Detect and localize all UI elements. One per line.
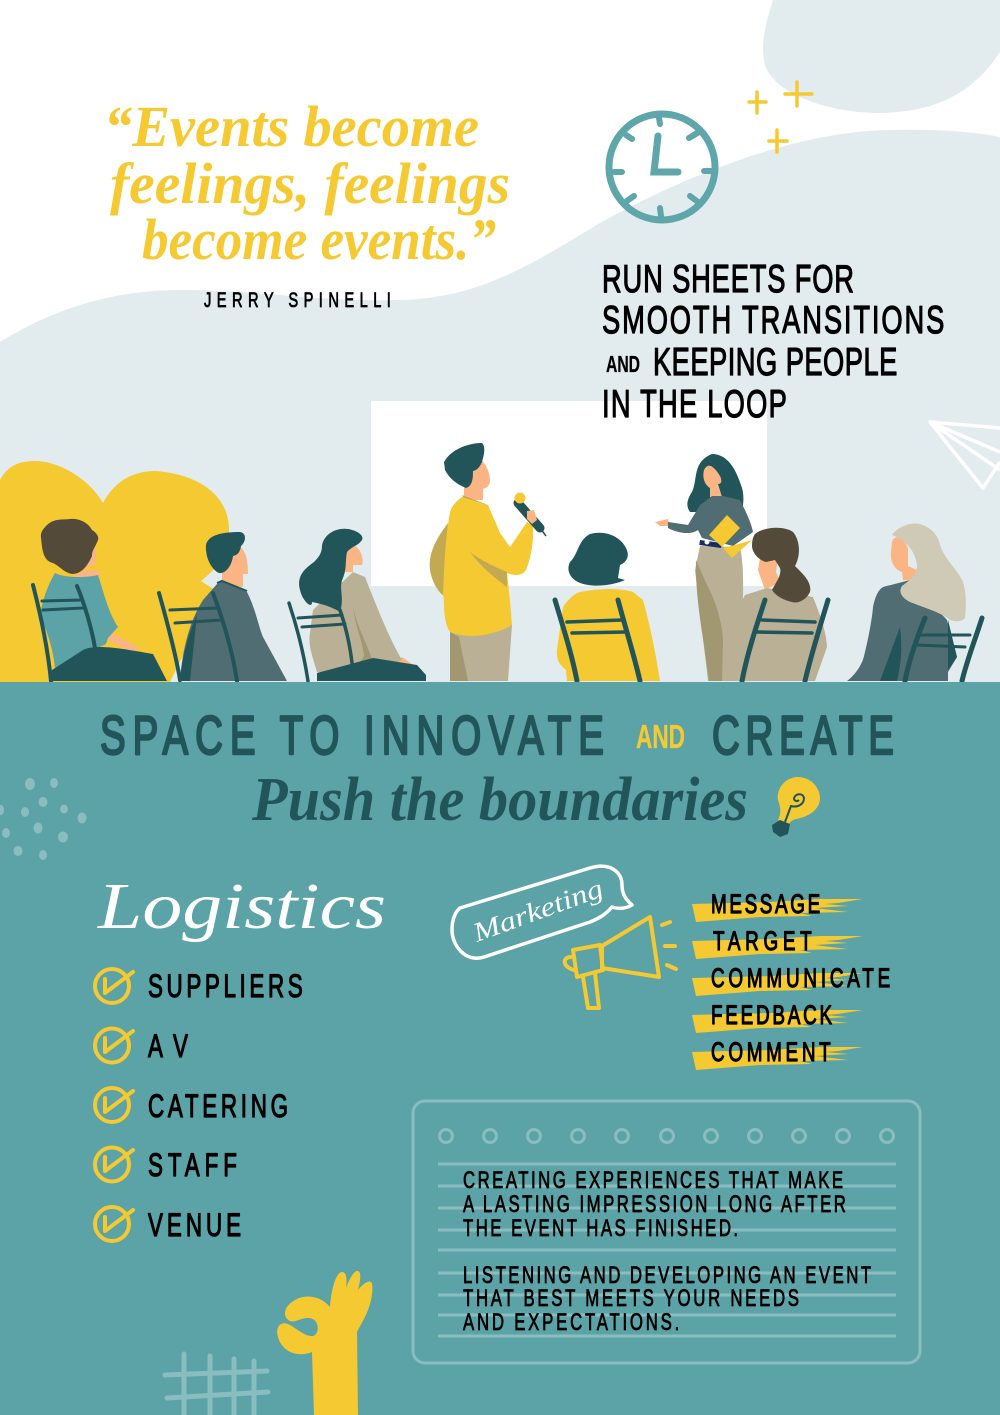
background: top right blob (763, 0, 1000, 113)
icon: ok hand (277, 1271, 372, 1415)
run sheets text (602, 258, 944, 426)
brush strokes (692, 899, 863, 1070)
chair (159, 593, 237, 681)
yellow folder (709, 515, 752, 558)
icon: grid sketch (165, 1354, 268, 1415)
projection screen (371, 401, 767, 586)
marketing speech bubble: Marketing (468, 873, 607, 948)
heading: logistics: Logistics (97, 870, 386, 943)
quote: feelings, feelings (110, 151, 510, 216)
yellow bush (0, 461, 229, 682)
brush list: marketing items (692, 889, 890, 1070)
chair (555, 600, 640, 681)
run sheets text: AND (606, 351, 640, 377)
icon: microphone (514, 492, 546, 536)
item: venue: VENUE (148, 1207, 241, 1243)
notepad text (463, 1167, 871, 1336)
chair (905, 618, 982, 681)
brush labels: COMMENT (711, 1037, 831, 1067)
quote attribution: JERRY SPINELLI (204, 288, 391, 312)
quote: become events.” (142, 207, 496, 272)
background: pale wave (0, 130, 1000, 682)
notepad text: AND EXPECTATIONS. (463, 1309, 679, 1336)
item: catering: CATERING (148, 1088, 288, 1124)
person: man with microphone (430, 443, 546, 681)
heading: space to innovate and create: CREATE (712, 705, 894, 767)
item: av: AV (148, 1028, 188, 1064)
brush labels: COMMUNICATE (711, 963, 890, 993)
brush labels: TARGET (713, 926, 812, 956)
icon: megaphone (565, 917, 676, 1008)
item: suppliers: SUPPLIERS (148, 968, 303, 1004)
run sheets text: KEEPING PEOPLE (653, 341, 897, 384)
heading: space to innovate and create (100, 705, 894, 767)
panel: teal lower section (0, 682, 1000, 1415)
item: av (95, 1028, 188, 1064)
notepad text: A LASTING IMPRESSION LONG AFTER (463, 1191, 846, 1218)
person: woman with grey hair (847, 523, 982, 681)
person: man in grey jacket (159, 532, 287, 681)
item: staff: STAFF (148, 1147, 237, 1183)
heading: space to innovate and create: AND (636, 718, 685, 755)
panel: notepad (413, 1101, 920, 1363)
item: staff (95, 1147, 237, 1183)
person: woman with bob hair (555, 533, 660, 681)
brush labels (711, 889, 890, 1067)
notepad text: THE EVENT HAS FINISHED. (463, 1215, 738, 1242)
icon: clock (609, 114, 715, 220)
notepad text: THAT BEST MEETS YOUR NEEDS (463, 1285, 799, 1312)
checklist (95, 968, 303, 1243)
marketing speech bubble (452, 866, 632, 958)
subheading: push the boundaries: Push the boundaries (251, 766, 748, 834)
person: curly hair in teal top (33, 519, 167, 681)
quote: “Events become (104, 94, 479, 159)
brush labels: MESSAGE (711, 889, 820, 919)
run sheets text: SMOOTH TRANSITIONS (602, 299, 944, 342)
person: woman in tan top (289, 529, 426, 681)
chair (33, 585, 95, 681)
decorative dots (0, 778, 86, 860)
icon: paper plane (930, 422, 1000, 488)
person: woman with brown ponytail (723, 528, 828, 681)
notepad text: LISTENING AND DEVELOPING AN EVENT (463, 1262, 871, 1289)
chair (289, 603, 353, 681)
brush labels: FEEDBACK (711, 1000, 832, 1030)
item: venue (95, 1207, 241, 1243)
icon: sparkles (749, 82, 812, 152)
heading: space to innovate and create: SPACE TO INNOVATE (100, 705, 604, 767)
quote (104, 94, 510, 272)
run sheets text: IN THE LOOP (602, 383, 787, 426)
chair (742, 600, 828, 681)
person: woman presenter (655, 454, 753, 681)
notepad text: CREATING EXPERIENCES THAT MAKE (463, 1167, 843, 1194)
icon: light bulb (772, 777, 820, 837)
run sheets text: RUN SHEETS FOR (602, 258, 854, 301)
